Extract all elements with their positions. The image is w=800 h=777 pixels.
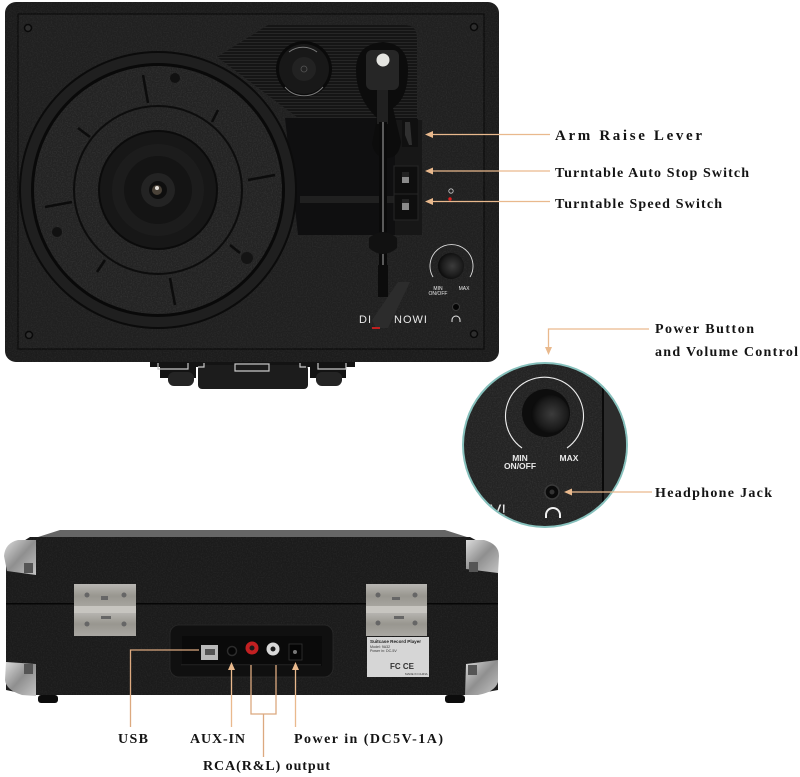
port panel	[170, 625, 333, 677]
case	[5, 2, 499, 362]
brand logo: NOWI	[394, 314, 428, 326]
zoomed knob labels: ON/OFF	[504, 461, 536, 471]
speed switch	[394, 194, 418, 220]
port: RCA right	[246, 642, 258, 654]
arrow: speed switch	[425, 198, 550, 205]
label: arm raise lever: Arm Raise Lever	[555, 128, 702, 144]
brand logo	[359, 314, 428, 326]
zoomed knob labels: MIN	[512, 453, 528, 463]
headphone jack	[452, 304, 460, 322]
screws	[24, 24, 478, 338]
dark deck recess	[285, 118, 417, 235]
arrow: auto stop switch	[425, 168, 550, 174]
zoomed knob	[506, 377, 583, 448]
label: power button and volume control: Power Button	[655, 322, 754, 337]
platter	[19, 51, 297, 329]
product label: FC CE	[390, 662, 415, 671]
arm raise lever	[402, 119, 418, 147]
volume knob: MIN	[433, 286, 443, 292]
right hinge	[366, 584, 427, 636]
label: auto stop switch: Turntable Auto Stop Switch	[555, 166, 749, 181]
label: RCA output: RCA(R&L) output	[203, 759, 330, 774]
panel: zoomed controls circle	[462, 360, 634, 530]
zoomed knob labels	[504, 453, 579, 471]
label: speed switch: Turntable Speed Switch	[555, 197, 722, 212]
arrow: AUX-IN	[228, 662, 235, 727]
product label	[367, 637, 429, 677]
arrow: power button	[545, 329, 649, 355]
volume knob	[429, 245, 473, 297]
panel: zoomed controls circle: V!	[490, 501, 506, 520]
arrow: RCA output bracket	[251, 665, 276, 757]
port: AUX	[228, 646, 236, 656]
arrow: arm raise lever	[425, 131, 550, 138]
label: power in: Power in (DC5V-1A)	[294, 732, 443, 747]
counterweight disc	[276, 41, 332, 97]
handle	[150, 362, 355, 389]
tonearm	[356, 42, 410, 329]
panel: turntable rear view	[4, 530, 499, 703]
product label: MADE IN CHINA	[405, 672, 428, 676]
zoomed headphone jack	[545, 485, 560, 518]
power indicator	[448, 189, 453, 201]
port: RCA left	[266, 642, 280, 656]
zoomed knob labels: MAX	[560, 453, 579, 463]
arrow: USB	[130, 650, 199, 727]
label: power button and volume control: and Volume Control	[655, 345, 798, 360]
ribbed deck plate	[217, 25, 422, 234]
auto stop switch	[394, 166, 418, 194]
label: USB: USB	[118, 732, 148, 747]
port: DC power	[289, 644, 302, 660]
port: USB	[201, 645, 218, 660]
top lid strip	[35, 530, 470, 538]
metal corners	[4, 540, 499, 696]
label: headphone jack: Headphone Jack	[655, 486, 772, 501]
volume knob: ON/OFF	[429, 291, 447, 297]
label: power button and volume control	[655, 322, 798, 360]
panel: turntable top view	[5, 2, 499, 389]
product label: Model: 9A32	[370, 645, 390, 649]
arrow: headphone jack	[564, 488, 652, 496]
left hinge	[74, 584, 136, 636]
label: AUX-IN: AUX-IN	[190, 732, 245, 747]
arrow: power in	[292, 662, 299, 727]
volume knob: MAX	[459, 286, 470, 292]
product label: Power in: DC-5V	[370, 649, 397, 653]
brand logo: DI	[359, 314, 372, 326]
product label: Suitcase Record Player	[370, 639, 421, 644]
rear body	[6, 537, 498, 695]
feet	[38, 695, 58, 703]
